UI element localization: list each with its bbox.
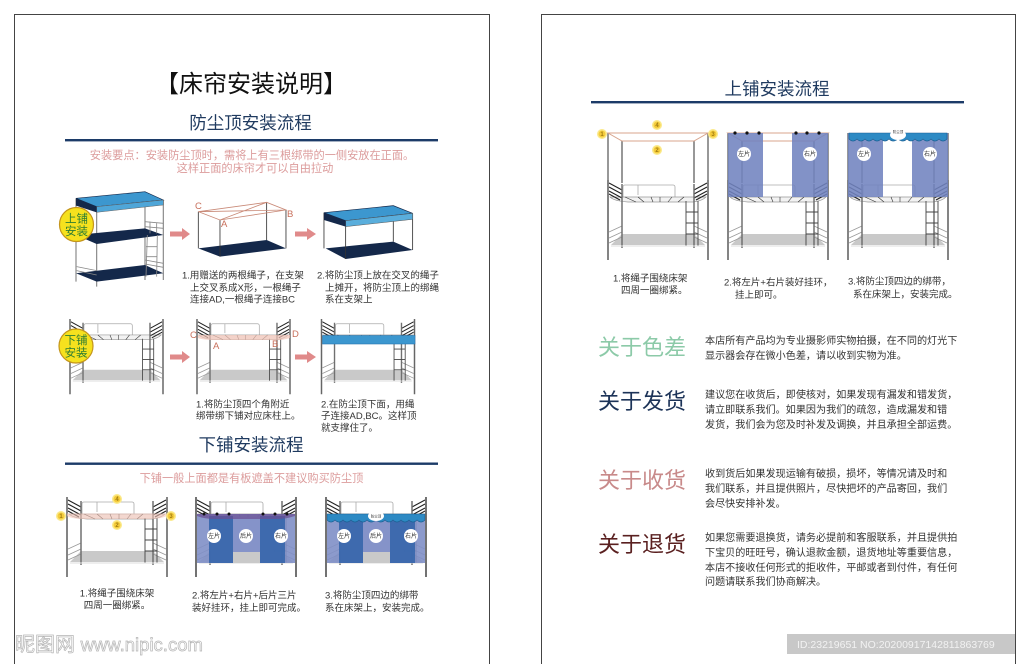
text: returns: 如果您需要退换货，请务必提前和客服联系，并且提供拍 <box>705 531 957 544</box>
step text: upper bunk 2: 2.将左片+右片装好挂环， <box>724 276 832 288</box>
diagram: lower bunk step 1 <box>56 494 176 577</box>
diagram: lower bunk step 2 curtains: 后片 <box>240 532 252 540</box>
diagram: lower bunk step 3 dust top: 防尘顶 <box>371 514 382 518</box>
step text: upper bunk 3: 3.将防尘顶四边的绑带， <box>848 276 951 288</box>
diagram: bed with rope: A <box>213 341 220 352</box>
step text: lower 2: 就支撑住了。 <box>321 422 378 434</box>
step text: lower bunk 3: 系在床架上，安装完成。 <box>325 602 430 614</box>
step text: lower bunk 1: 四周一圈绑紧。 <box>84 600 150 612</box>
badge: lower bunk: 下铺 <box>64 334 88 347</box>
step text: upper 1: 上交叉系成X形，一根绳子 <box>190 282 301 294</box>
badge: upper bunk: 安装 <box>65 224 88 238</box>
page: left sheet <box>14 14 490 664</box>
diagram: upper bunk step 2 curtains: 左片 <box>738 150 750 158</box>
heading: upper bunk process: 上铺安装流程 <box>724 79 830 99</box>
diagram: upper bunk step 3 dust top <box>848 129 948 260</box>
text: colour difference <box>705 334 957 362</box>
step text: upper bunk 3: 系在床架上，安装完成。 <box>853 288 958 300</box>
step text: lower bunk 2: 装好挂环，挂上即可完成。 <box>192 602 306 614</box>
text: receiving <box>705 467 947 510</box>
diagram: lower bunk step 3 dust top: 左片 <box>338 532 350 540</box>
text: shipping: 请立即联系我们。如果因为我们的疏忽，造成漏发和错 <box>705 403 947 416</box>
heading: dust-top process: 防尘顶安装流程 <box>189 113 312 133</box>
diagram: upper bunk step 1: 4 <box>655 123 659 129</box>
diagram: lower bunk step 2 curtains <box>196 497 296 577</box>
text: returns: 本店不接收任何形式的拒收件，平邮或者到付件，有任何 <box>705 561 957 574</box>
step text: upper bunk 3 <box>848 276 958 300</box>
step text: lower bunk 1 <box>80 588 155 612</box>
diagram: lower bunk step 1: 1 <box>59 514 63 520</box>
heading rule <box>65 462 438 465</box>
heading: returns: 关于退货 <box>598 532 686 557</box>
step text: lower bunk 2 <box>192 590 306 614</box>
heading rule <box>591 101 964 103</box>
diagram: bed with rope <box>190 319 299 394</box>
diagram: lower bunk step 2 curtains: 右片 <box>275 532 287 540</box>
step text: upper 1: 1.用赠送的两根绳子，在支架 <box>182 270 304 282</box>
text: colour difference: 本店所有产品均为专业摄影师实物拍摄，在不同的灯光下 <box>705 334 957 347</box>
diagram: lower bunk step 1: 4 <box>115 497 119 503</box>
step text: upper 1: 连接AD,一根绳子连接BC <box>190 294 295 306</box>
note: dust-top installation <box>90 148 414 175</box>
heading: lower bunk process: 下铺安装流程 <box>198 435 304 455</box>
text: receiving: 会尽快安排补发。 <box>705 497 786 510</box>
diagram: bed with rope: C <box>190 330 197 341</box>
diagram: upper bunk step 3 dust top: 左片 <box>858 150 870 158</box>
diagram: upper bunk step 3 dust top: 防尘顶 <box>893 129 904 134</box>
step text: upper 1 <box>182 270 304 306</box>
diagram: bed with rope: D <box>292 329 299 340</box>
note: dust-top installation: 这样正面的床帘才可以自由拉动 <box>177 161 333 175</box>
text: returns <box>705 531 957 588</box>
step text: upper bunk 2: 挂上即可。 <box>735 289 783 301</box>
diagram: dust top on frame <box>324 206 413 259</box>
diagram: lower bunk step 1: 3 <box>169 514 173 520</box>
diagram: lower bunk step 1: 2 <box>115 523 119 529</box>
watermark: image id bar <box>787 634 1015 654</box>
badge: lower bunk: 安装 <box>64 346 88 360</box>
heading rule <box>65 139 438 141</box>
text: shipping <box>705 388 957 431</box>
step text: upper 2: 上摊开，将防尘顶上的绑绳 <box>325 282 440 294</box>
step text: upper bunk 1: 四周一圈绑紧。 <box>621 284 688 296</box>
step text: lower 1: 绑带绑下铺对应床柱上。 <box>196 410 301 422</box>
step text: lower bunk 2: 2.将左片+右片+后片三片 <box>192 590 297 602</box>
diagram: upper bunk step 3 dust top: 右片 <box>924 150 936 158</box>
step text: upper bunk 2 <box>724 276 832 301</box>
heading: receiving: 关于收货 <box>598 468 686 493</box>
arrow <box>295 351 316 363</box>
diagram: bed with blue dust top <box>322 319 415 394</box>
label: C: C <box>195 201 202 212</box>
text: shipping: 发货，我们会为您及时补发及调换，并且承担全部运费。 <box>705 418 957 431</box>
badge: upper bunk: 上铺 <box>65 212 88 226</box>
arrow <box>295 228 316 240</box>
watermark: nipic: 昵图网 www.nipic.com <box>15 634 203 656</box>
step text: upper bunk 1 <box>613 272 688 296</box>
badge: upper bunk <box>60 208 94 242</box>
diagram: upper bunk step 1 <box>597 120 718 260</box>
text: receiving: 我们联系，并且提供照片，尽快把坏的产品寄回，我们 <box>705 482 947 495</box>
diagram: lower bunk step 2 curtains: 左片 <box>208 532 220 540</box>
diagram: upper bunk step 1: 3 <box>711 132 715 138</box>
diagram: upper bunk frame with dust top <box>76 192 163 287</box>
diagram: rope crossed frame <box>198 202 286 257</box>
step text: lower 2: 2.在防尘顶下面，用绳 <box>321 398 415 410</box>
step text: lower bunk 3 <box>325 590 430 614</box>
arrow <box>170 228 190 240</box>
title: 【床帘安装说明】 <box>155 71 347 98</box>
heading: colour difference: 关于色差 <box>598 335 686 360</box>
text: returns: 下宝贝的旺旺号，确认退款金额，退货地址等重要信息， <box>705 546 957 559</box>
text: returns: 问题请联系我们协商解决。 <box>705 575 826 588</box>
step text: upper 2: 系在支架上 <box>325 294 373 306</box>
diagram: lower bunk step 3 dust top <box>326 497 426 577</box>
heading: shipping: 关于发货 <box>598 389 686 414</box>
diagram: lower bunk bed <box>70 319 163 394</box>
label: B: B <box>287 209 293 220</box>
page: right sheet <box>542 14 1016 664</box>
step text: upper 2 <box>317 270 440 306</box>
step text: upper 2: 2.将防尘顶上放在交叉的绳子 <box>317 270 439 282</box>
step text: lower 2: 子连接AD,BC。这样顶 <box>321 410 417 422</box>
note: dust-top installation: 安装要点：安装防尘顶时，需将上有三根绑带的一侧安放在正面。 <box>90 148 414 162</box>
step text: lower 2 <box>321 398 417 434</box>
step text: lower 1: 1.将防尘顶四个角附近 <box>196 398 290 410</box>
diagram: upper bunk step 1: 2 <box>655 148 659 154</box>
text: receiving: 收到货后如果发现运输有破损，损坏，等情况请及时和 <box>705 467 947 480</box>
step text: lower bunk 3: 3.将防尘顶四边的绑带 <box>325 590 419 602</box>
text: shipping: 建议您在收货后，即使核对，如果发现有漏发和错发货， <box>705 388 957 401</box>
arrow <box>170 351 190 363</box>
diagram: bed with rope: B <box>272 339 278 350</box>
step text: upper bunk 1: 1.将绳子围绕床架 <box>613 272 688 284</box>
diagram: lower bunk step 3 dust top: 后片 <box>370 532 382 540</box>
text: colour difference: 显示器会存在微小色差，请以收到实物为准。 <box>705 349 907 362</box>
watermark: image id bar: ID:23219651 NO:20200917142811863769 <box>797 639 995 651</box>
label: A: A <box>221 219 228 230</box>
badge: lower bunk <box>59 329 93 363</box>
diagram: upper bunk step 2 curtains: 右片 <box>804 150 816 158</box>
note: lower bunk: 下铺一般上面都是有板遮盖不建议购买防尘顶 <box>140 471 363 485</box>
step text: lower bunk 1: 1.将绳子围绕床架 <box>80 588 155 600</box>
diagram: upper bunk step 2 curtains <box>728 131 828 260</box>
step text: lower 1 <box>196 398 301 422</box>
diagram: upper bunk step 1: 1 <box>600 132 604 138</box>
diagram: lower bunk step 3 dust top: 右片 <box>405 532 417 540</box>
